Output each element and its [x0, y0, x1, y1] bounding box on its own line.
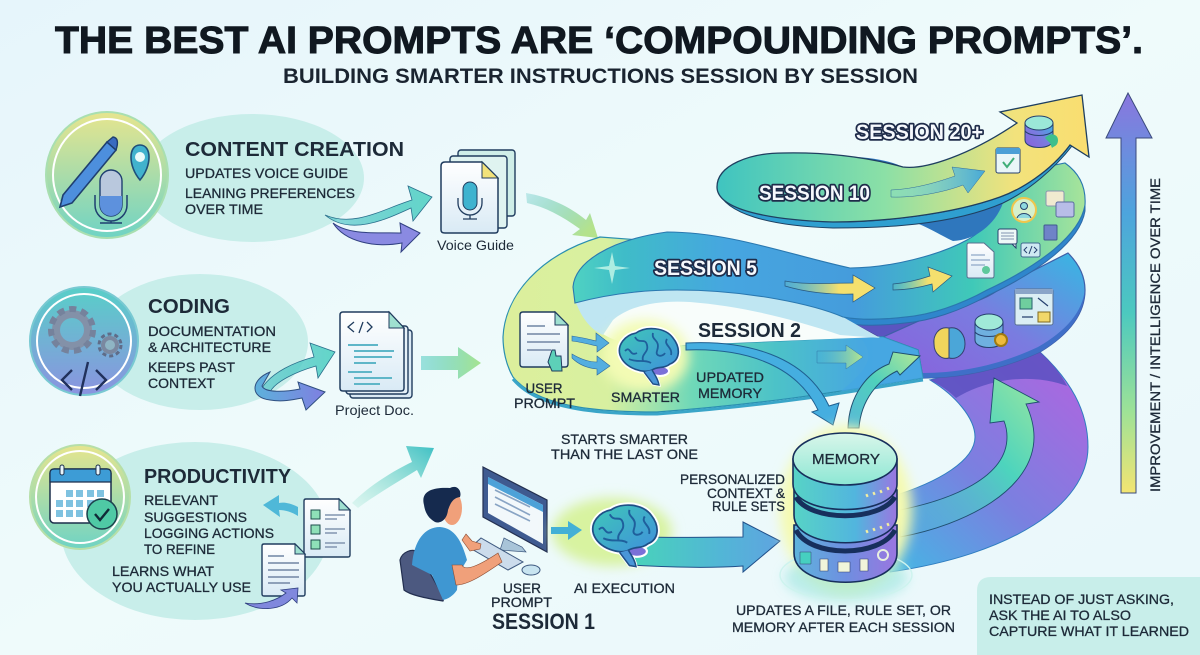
text: content creation details: UPDATES VOICE GUIDE — [185, 165, 348, 181]
text: coding details: KEEPS PAST — [148, 359, 235, 375]
label: starts smarter — [551, 431, 698, 462]
arrow: small session 2 — [817, 345, 863, 369]
callout: CAPTURE WHAT IT LEARNED — [989, 623, 1189, 639]
icon: calendar with check — [30, 445, 130, 549]
icon: half brain — [934, 328, 965, 358]
text: productivity details: YOU ACTUALLY USE — [112, 579, 251, 595]
icon: chat note — [998, 229, 1017, 248]
icon: code chip — [1021, 243, 1040, 257]
icon: notes document — [262, 544, 305, 596]
label: user prompt session 2: PROMPT — [514, 395, 575, 411]
panel: content creation — [46, 112, 404, 242]
label: personalized context: PERSONALIZED — [680, 471, 785, 487]
label: improvement axis: IMPROVEMENT / INTELLIGENCE OVER TIME — [1147, 178, 1163, 492]
text: coding details — [148, 323, 276, 391]
arrow: to voice guide — [325, 186, 432, 225]
label: personalized context — [680, 471, 786, 514]
icon: session 2 brain — [619, 329, 678, 385]
label: updated memory: UPDATED — [696, 369, 764, 385]
icon: AI brain — [593, 505, 657, 567]
arrow: to project doc — [262, 343, 335, 392]
ribbon: white interior — [590, 299, 880, 346]
label: updated memory: MEMORY — [698, 385, 763, 401]
icon: project documents — [340, 312, 412, 398]
glow: session 2 brain — [601, 320, 689, 392]
label: starts smarter: THAN THE LAST ONE — [551, 446, 698, 462]
icon: pen, pin and microphone — [46, 112, 168, 238]
label: user prompt session 2: USER — [526, 380, 562, 396]
label: updates a file: UPDATES A FILE, RULE SET, OR — [736, 602, 951, 618]
arrow: purple refine — [245, 588, 298, 609]
text: content creation details — [185, 165, 355, 217]
callout — [977, 577, 1200, 655]
label: updates a file — [732, 602, 955, 635]
icon: arrow left — [263, 495, 298, 517]
ribbon: session 5 and green band — [573, 163, 1085, 319]
icon: large document — [967, 243, 994, 278]
text: productivity details — [112, 492, 274, 595]
callout: INSTEAD OF JUST ASKING, — [989, 591, 1174, 607]
text: productivity details: LOGGING ACTIONS — [144, 525, 274, 541]
label: memory: MEMORY — [812, 451, 880, 468]
ribbon: session 5 and green band rim — [843, 205, 1085, 325]
callout: ASK THE AI TO ALSO — [989, 607, 1131, 623]
tier: bottom — [794, 525, 897, 582]
tier: top — [793, 433, 897, 510]
label: project doc: Project Doc. — [335, 402, 414, 418]
label: user prompt session 2 — [514, 380, 575, 411]
arrow: session 5 yellow two — [893, 267, 952, 292]
panel: session 1 — [400, 467, 780, 634]
arrow: purple curl — [255, 372, 325, 410]
sparkle: session 5 — [594, 252, 630, 284]
arrow: voice guide to spiral — [526, 193, 598, 238]
arrow: brain to memory — [686, 343, 839, 425]
ribbon: session 2 chevron face — [840, 337, 923, 392]
panel: coding — [30, 274, 308, 410]
label: user prompt session 1: PROMPT — [491, 594, 552, 610]
label: session 10: SESSION 10 — [759, 182, 870, 205]
memory database — [780, 426, 912, 602]
icon: checklist document — [304, 499, 350, 557]
tier: middle — [794, 490, 897, 543]
label: updated memory — [696, 369, 764, 401]
text: content creation details: LEANING PREFERENCES — [185, 185, 355, 201]
arrow: productivity to session 1 — [352, 446, 434, 508]
arrow: session 10 — [891, 167, 985, 197]
arrow: green rising — [900, 378, 1039, 537]
ribbon: dark hole — [808, 157, 903, 172]
arrow: memory up — [848, 352, 920, 428]
title: THE BEST AI PROMPTS ARE ‘COMPOUNDING PROMPTS’. — [55, 20, 1143, 62]
arrow: project doc to spiral — [421, 347, 481, 379]
heading: productivity: PRODUCTIVITY — [144, 466, 292, 488]
subtitle: BUILDING SMARTER INSTRUCTIONS SESSION BY SESSION — [283, 65, 918, 88]
ribbon: blue and purple band — [883, 253, 1085, 378]
icon: chat bubbles — [1046, 191, 1074, 217]
heading: coding: CODING — [148, 296, 230, 318]
icon: voice guide documents — [441, 150, 515, 233]
icon: window with files — [1015, 289, 1053, 325]
arrow: big, brain to memory — [630, 522, 780, 572]
ribbon: rim of blue band — [923, 288, 1085, 378]
label: starts smarter: STARTS SMARTER — [561, 431, 688, 447]
icon: database with gear — [975, 314, 1007, 348]
ribbon: inner lining — [575, 290, 880, 338]
label: session 2: SESSION 2 — [698, 320, 801, 342]
label: personalized context: CONTEXT & — [707, 485, 786, 501]
ribbon: session 10 to 20 arrow — [717, 95, 1089, 222]
label: personalized context: RULE SETS — [712, 498, 785, 514]
panel: productivity — [30, 442, 350, 620]
icon: database with plant — [1025, 116, 1058, 148]
icon: person at computer — [400, 467, 547, 601]
arrow: computer to brain — [551, 521, 582, 540]
label: user prompt session 1 — [491, 580, 552, 610]
arrow: purple return — [333, 223, 420, 252]
icon: small doc — [1044, 225, 1057, 240]
label: session 20+: SESSION 20+ — [856, 121, 983, 144]
text: coding details: DOCUMENTATION — [148, 323, 276, 339]
label: voice guide: Voice Guide — [437, 237, 514, 253]
label: user prompt session 1: USER — [503, 580, 541, 596]
label: session 1: SESSION 1 — [492, 609, 595, 634]
label: smarter: SMARTER — [611, 389, 680, 405]
icon: calendar — [996, 148, 1020, 173]
text: productivity details: LEARNS WHAT — [112, 563, 214, 579]
ribbon: dark underside — [905, 190, 1003, 241]
ribbon: dark purple wedge — [838, 300, 960, 339]
text: productivity details: TO REFINE — [144, 541, 215, 557]
glow: brain — [552, 498, 672, 566]
ribbon: session 2 rim — [513, 379, 923, 414]
text: productivity details: SUGGESTIONS — [144, 509, 247, 525]
ribbon: session 10 rim — [718, 145, 1089, 228]
label: AI execution: AI EXECUTION — [574, 580, 675, 596]
icon: user prompt document — [520, 312, 568, 371]
arrow: improvement axis — [1106, 93, 1152, 493]
heading: content creation: CONTENT CREATION — [185, 139, 404, 161]
icon: gears and code — [30, 287, 138, 396]
text: coding details: & ARCHITECTURE — [148, 339, 271, 355]
arrows: prompt into brain — [572, 333, 610, 375]
text: coding details: CONTEXT — [148, 375, 215, 391]
ribbon: dark purple shade — [930, 352, 1067, 398]
ribbon: lower purple band — [890, 352, 1088, 572]
ribbon: session 2 blob — [503, 237, 923, 412]
icon: person badge — [1012, 198, 1036, 222]
label: updates a file: MEMORY AFTER EACH SESSION — [732, 619, 955, 635]
text: productivity details: RELEVANT — [144, 492, 218, 508]
text: content creation details: OVER TIME — [185, 201, 263, 217]
spiral ribbon — [503, 95, 1089, 572]
arrow: session 5 yellow one — [785, 275, 875, 302]
label: session 5: SESSION 5 — [654, 257, 757, 280]
